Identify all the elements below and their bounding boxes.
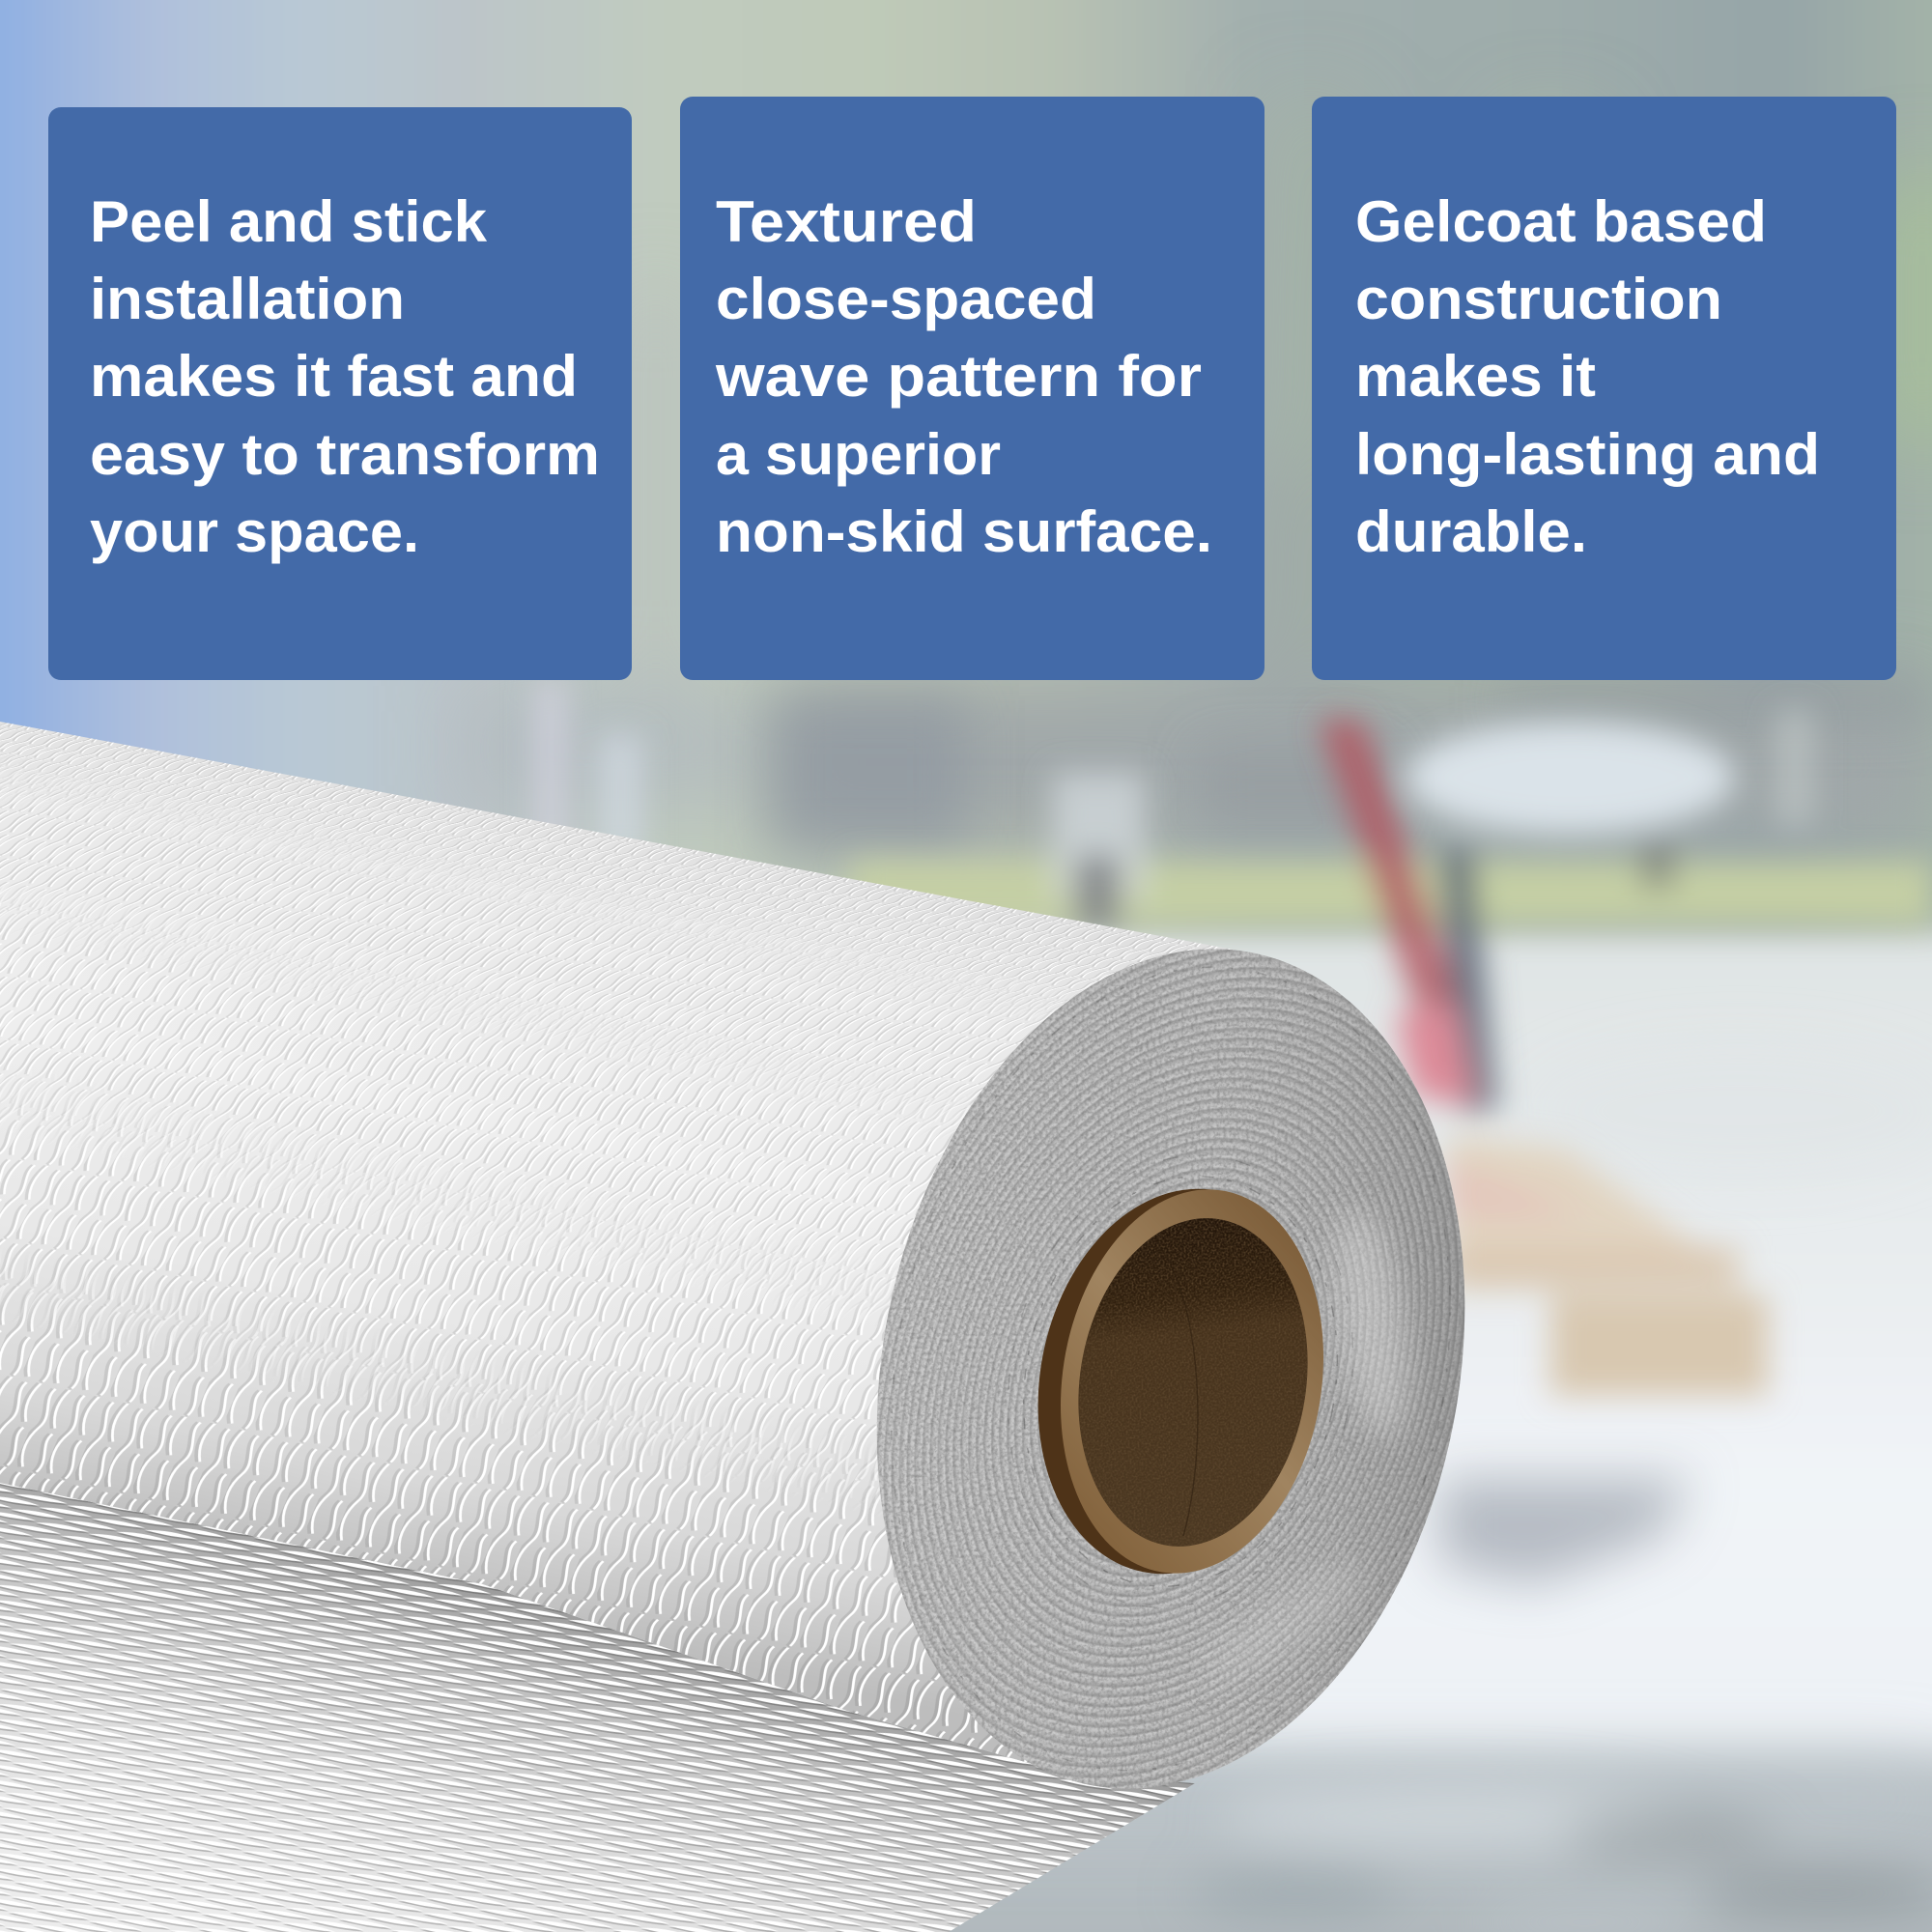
- text: peel and stick description: makes it fast and: [90, 344, 578, 409]
- text: gelcoat durability description: long-lasting and: [1355, 422, 1820, 487]
- text: gelcoat durability description: makes it: [1355, 344, 1596, 409]
- text: textured surface description: Textured: [716, 189, 977, 254]
- panel: peel and stick: [48, 107, 632, 680]
- text: peel and stick description: easy to transform: [90, 422, 600, 487]
- text: textured surface description: wave pattern for: [715, 344, 1202, 409]
- text: textured surface description: non-skid surface.: [716, 499, 1212, 564]
- product roll: flat unrolled sheet: [0, 1483, 1195, 1932]
- text: gelcoat durability description: Gelcoat based: [1355, 189, 1767, 254]
- text: gelcoat durability description: construction: [1355, 267, 1722, 331]
- panel: textured wave pattern: [680, 97, 1264, 680]
- product roll: cardboard core: [1037, 1188, 1323, 1575]
- panel: gelcoat construction: [1312, 97, 1896, 680]
- text: textured surface description: a superior: [716, 422, 1001, 487]
- text: textured surface description: [715, 189, 1212, 564]
- text: gelcoat durability description: [1355, 189, 1820, 564]
- text: peel and stick description: your space.: [90, 499, 419, 564]
- product roll: textured wave surface: [0, 722, 1234, 1764]
- text: gelcoat durability description: durable.: [1355, 499, 1587, 564]
- product roll: end face with concentric layers: [877, 949, 1464, 1789]
- text: peel and stick description: installation: [90, 267, 405, 331]
- text: peel and stick description: [90, 189, 600, 564]
- text: textured surface description: close-spaced: [716, 267, 1096, 331]
- text: peel and stick description: Peel and stick: [90, 189, 488, 254]
